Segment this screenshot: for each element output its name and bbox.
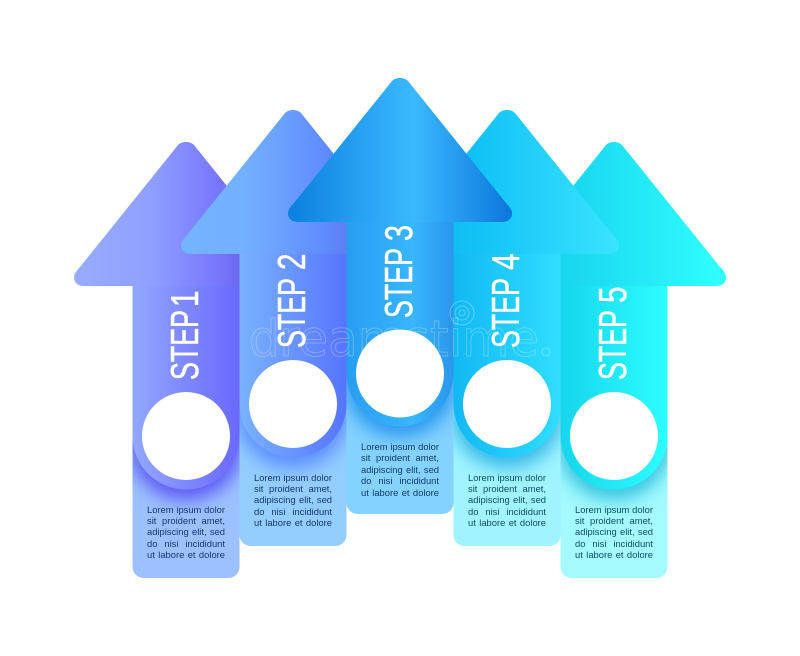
white circle (570, 392, 658, 480)
body text: Lorem ipsum dolor (147, 504, 225, 514)
step label: STEP (592, 310, 635, 380)
white circle (142, 392, 230, 480)
body text: sit proident amet, (361, 452, 439, 463)
body text: ut labore et dolore (254, 517, 332, 528)
body text: ut labore et dolore (361, 487, 439, 498)
body text (468, 472, 546, 528)
body text: ut labore et dolore (575, 549, 653, 560)
white circle (249, 360, 337, 448)
body text: sit proident amet, (468, 483, 546, 494)
body text: adipiscing elit, sed (254, 494, 332, 505)
panel: step 3 arrow (288, 78, 512, 514)
step label: 2 (271, 254, 314, 270)
body text: sit proident amet, (254, 483, 332, 494)
stem with round end (454, 254, 560, 457)
body text (361, 441, 439, 498)
body text: Lorem ipsum dolor (468, 472, 546, 482)
arrow head (395, 110, 619, 254)
body text: adipiscing elit, sed (468, 494, 546, 505)
stem with round end (132, 286, 240, 489)
body text: do nisi incididunt (468, 506, 546, 517)
step label: 5 (592, 286, 635, 303)
lower text tab (560, 342, 668, 578)
arrow head (74, 142, 298, 286)
tab shadow (240, 406, 346, 478)
panel: step 4 arrow (454, 110, 619, 546)
lower text tab (132, 342, 240, 578)
arrow head (502, 142, 726, 286)
body text: adipiscing elit, sed (147, 526, 225, 537)
step label: 4 (485, 254, 528, 270)
body text: adipiscing elit, sed (575, 526, 653, 537)
white circle (356, 330, 444, 418)
body text: Lorem ipsum dolor (361, 441, 439, 452)
body text: Lorem ipsum dolor (254, 472, 332, 482)
step label: 3 (378, 225, 421, 241)
body text: sit proident amet, (147, 515, 225, 526)
panel: step 2 arrow (181, 110, 346, 546)
white circle (463, 360, 551, 448)
step label: STEP (485, 278, 528, 348)
watermark: dreamstime (249, 310, 539, 368)
body text: do nisi incididunt (147, 538, 225, 549)
arrow head (288, 78, 512, 222)
tab shadow (454, 406, 560, 482)
lower text tab (346, 278, 454, 514)
lower text tab (240, 310, 346, 546)
body text (147, 504, 225, 560)
step label: STEP (271, 278, 314, 348)
body text: Lorem ipsum dolor (575, 504, 653, 514)
stem with round end (240, 254, 346, 457)
tab shadow (132, 438, 240, 512)
tab shadow (346, 375, 454, 450)
panel: step 1 arrow (74, 142, 240, 578)
body text: do nisi incididunt (361, 475, 439, 486)
body text: do nisi incididunt (575, 538, 653, 549)
lower text tab (454, 310, 560, 546)
panel: step 5 arrow (560, 142, 726, 578)
body text: sit proident amet, (575, 515, 653, 526)
stem with round end (346, 222, 454, 426)
body text (254, 472, 332, 528)
body text: adipiscing elit, sed (361, 464, 439, 475)
arrow head (181, 110, 405, 254)
step label: STEP (378, 248, 421, 318)
body text: do nisi incididunt (254, 506, 332, 517)
stem with round end (560, 286, 668, 489)
step label: STEP (164, 310, 207, 380)
step label: 1 (164, 290, 207, 307)
body text: ut labore et dolore (147, 549, 225, 560)
body text (575, 504, 653, 560)
body text: ut labore et dolore (468, 517, 546, 528)
tab shadow (560, 438, 668, 514)
